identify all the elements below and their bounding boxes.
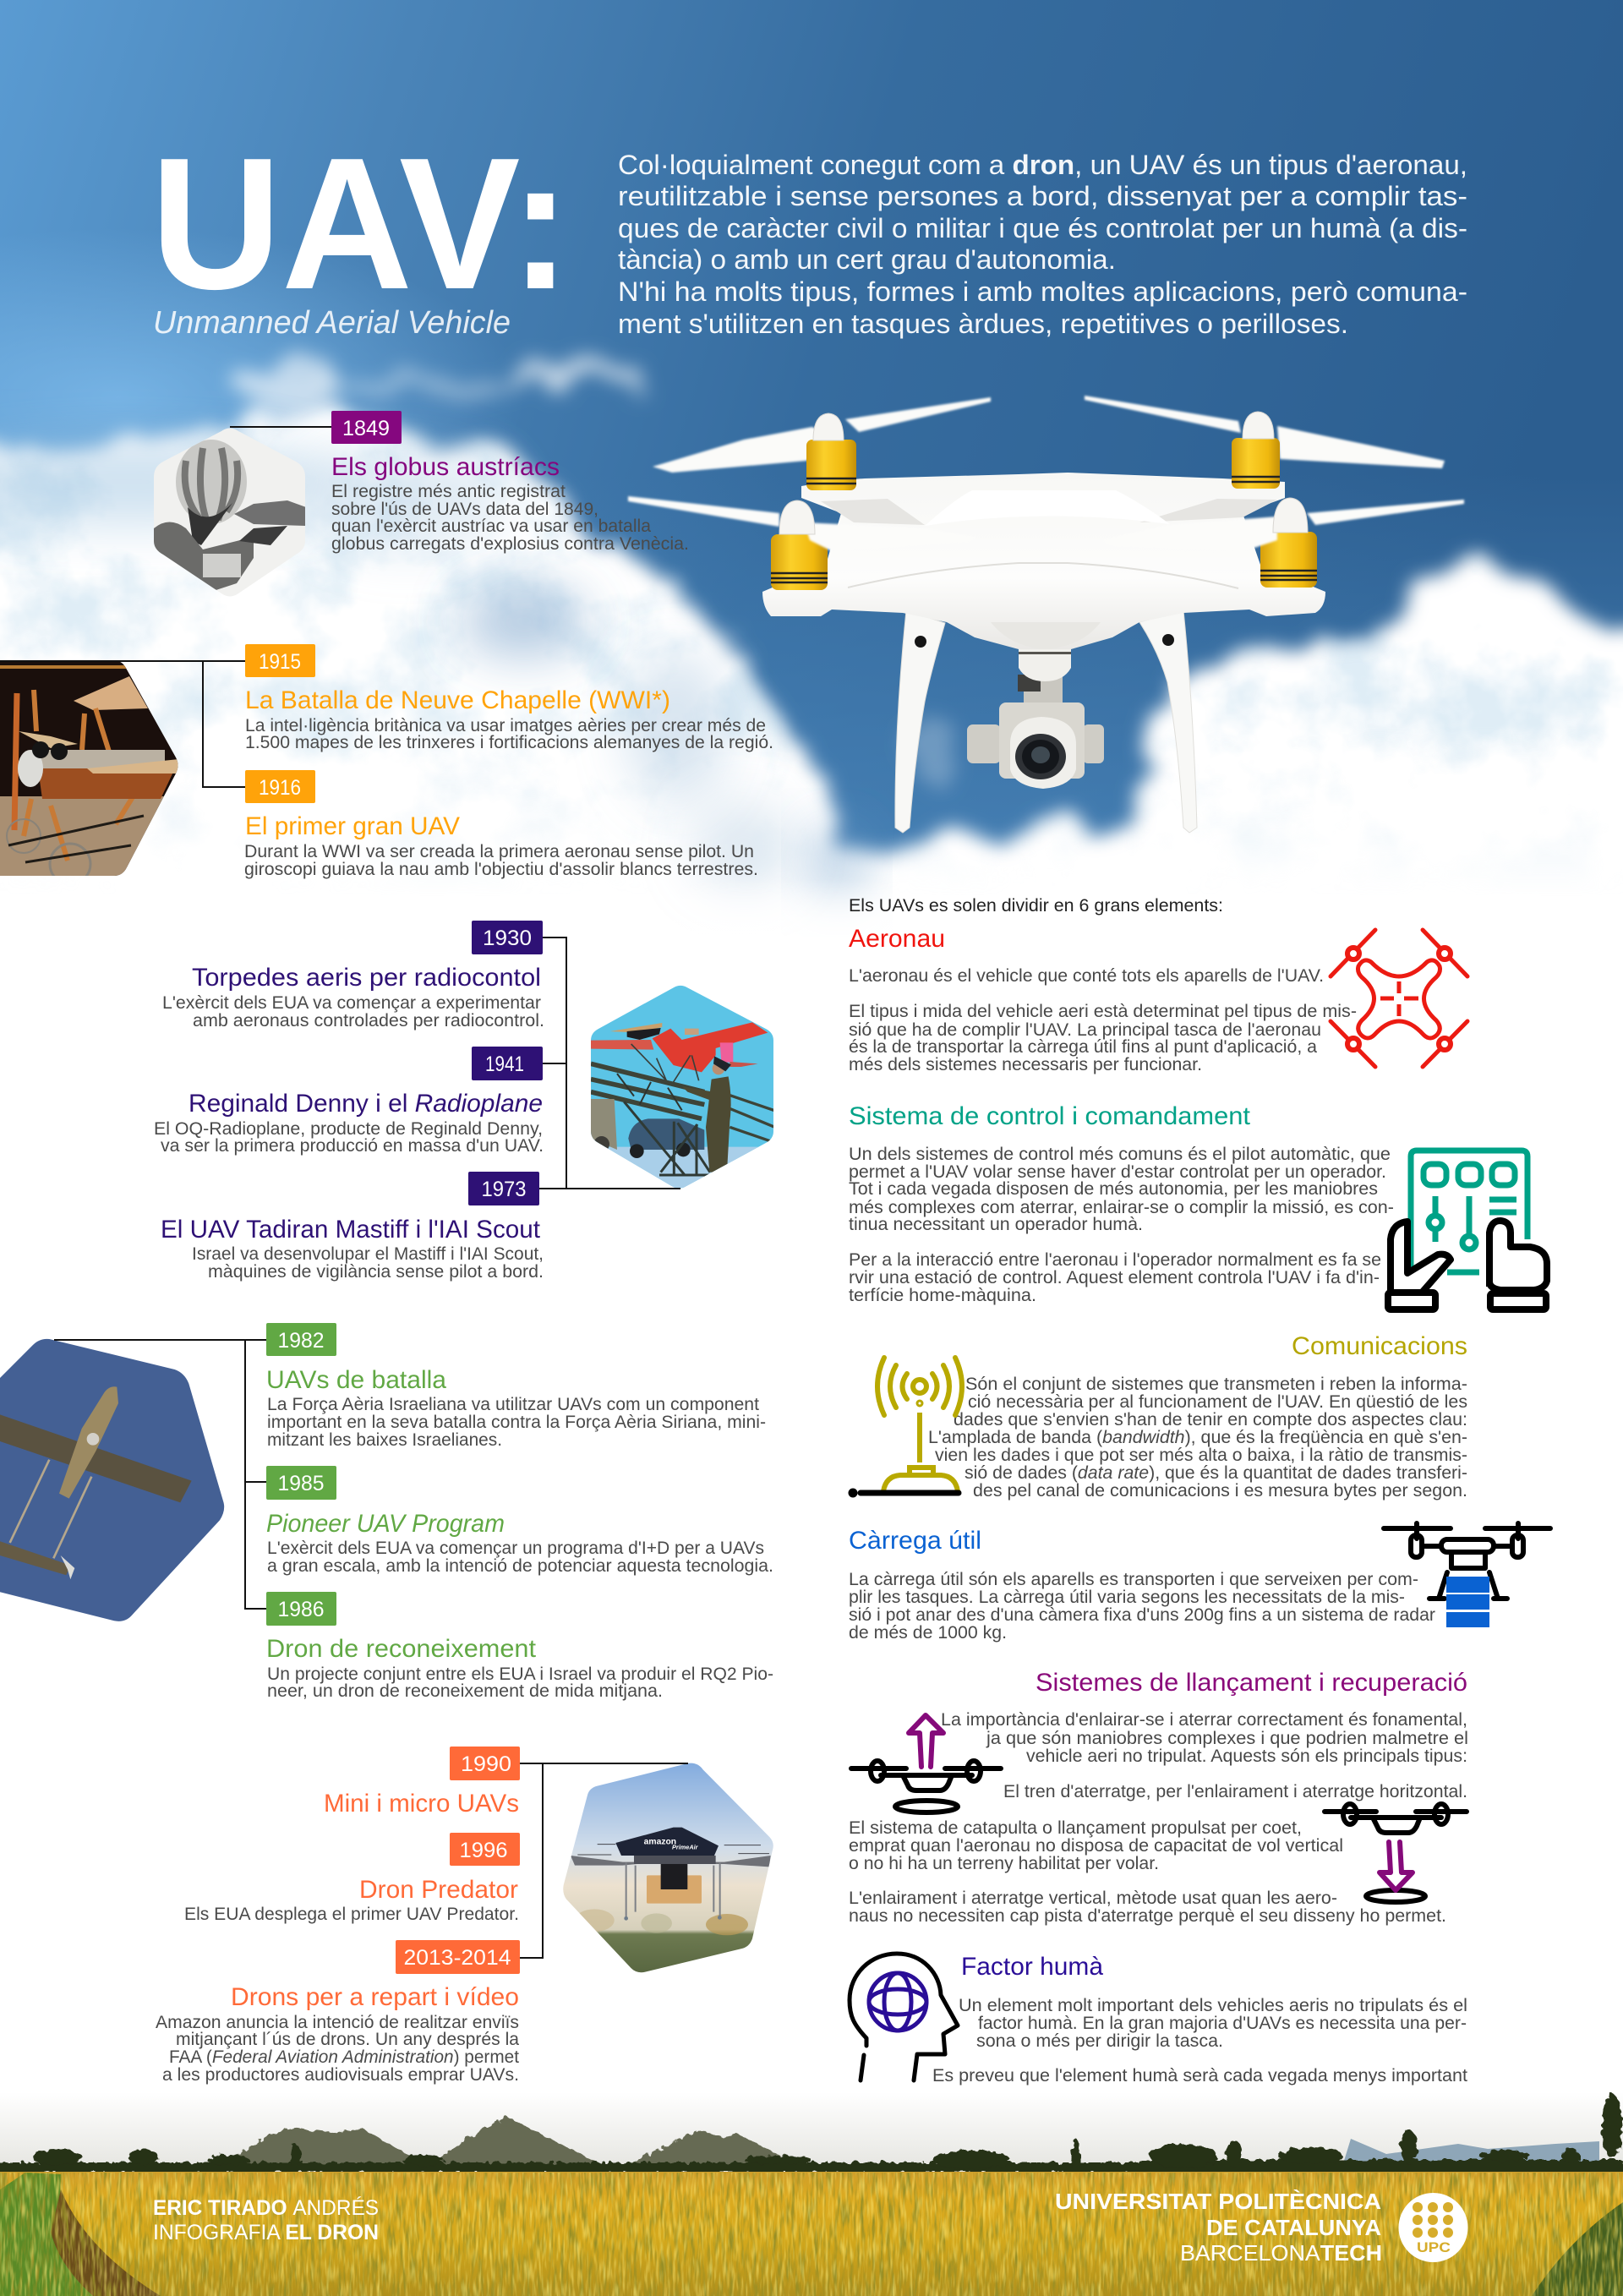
text 1982: mitzant les baixes Israelianes.	[267, 1430, 502, 1450]
green paths	[0, 2173, 101, 2296]
drone illustration	[628, 396, 1464, 833]
body text: factor humà. En la gran majoria d'UAVs es necessita una per-	[978, 2013, 1467, 2033]
heading 1915: La Batalla de Neuve Chapelle (WWI*)	[245, 686, 670, 714]
year badge 2013-2014: 2013-2014	[404, 1946, 511, 1970]
year badge 1996	[450, 1833, 520, 1866]
rear propellers	[653, 396, 1445, 473]
subtitle: Unmanned Aerial Vehicle	[153, 305, 511, 341]
connector	[54, 1340, 266, 1609]
text 1915	[245, 716, 773, 752]
heading 1930: Torpedes aeris per radiocontol	[192, 964, 541, 992]
body text: L'amplada de banda (bandwidth), que és la freqüència en què s'en-	[928, 1427, 1467, 1447]
footer credits	[153, 2195, 379, 2244]
body text: de més de 1000 kg.	[849, 1622, 1007, 1643]
event text: globus carregats d'explosius contra Venècia.	[331, 534, 689, 554]
panel: Aeronau	[849, 925, 1467, 1074]
text 1986	[267, 1665, 773, 1701]
body text: permet a l'UAV volar sense haver d'estar controlat per un operador.	[849, 1162, 1386, 1182]
heading 1982: UAVs de batalla	[266, 1366, 446, 1394]
body text	[849, 1709, 1468, 1926]
year badge 1985	[266, 1466, 336, 1500]
heading: Factor humà	[961, 1953, 1103, 1981]
body text: vehicle aeri no tripulat. Aquests són els principals tipus:	[1026, 1746, 1467, 1766]
year badge 1986: 1986	[277, 1598, 325, 1621]
text 1916: giroscopi guiava la nau amb l'objectiu d'assolir blancs terrestres.	[244, 860, 758, 879]
year badge 1941: 1941	[485, 1052, 524, 1076]
text 2013-2014: FAA (Federal Aviation Administration) permet	[169, 2047, 519, 2067]
intro text block: ment s'utilitzen en tasques àrdues, repetitives o perilloses.	[618, 309, 1348, 339]
motors	[771, 438, 1317, 590]
text 2013-2014: mitjançant l´ús de drons. Un any després la	[176, 2030, 519, 2049]
text 1973: Israel va desenvolupar el Mastiff i l'IAI Scout,	[192, 1244, 544, 1264]
body text	[849, 1569, 1435, 1643]
body text: plir les tasques. La càrrega útil varia segons les necessitats de la mis-	[849, 1587, 1405, 1607]
field	[0, 2172, 1623, 2296]
body text: ja que són maniobres complexes i que podrien malmetre el	[986, 1728, 1468, 1748]
year badge 1990	[450, 1747, 520, 1780]
text 1986: Un projecte conjunt entre els EUA i Israel va produir el RQ2 Pio-	[267, 1665, 773, 1684]
body text	[849, 965, 1357, 1074]
year badge 1915: 1915	[259, 650, 301, 674]
body text: Tot i cada vegada disposen de més autonomia, per les maniobres	[849, 1178, 1378, 1199]
timeline 1990-2014	[156, 1747, 778, 2085]
icon: head with globe	[850, 1954, 958, 2080]
body text: o no hi ha un terreny habilitat per volar.	[849, 1853, 1159, 1873]
front propellers	[628, 496, 1464, 551]
hexagon photo: biplane	[0, 661, 180, 884]
rotor caps	[779, 412, 1308, 534]
legs	[895, 610, 1197, 833]
panel: Sistemes de llançament i recuperació	[849, 1669, 1468, 1926]
text 1996: Els EUA desplega el primer UAV Predator.	[184, 1905, 519, 1924]
text 1941: va ser la primera producció en massa d'un UAV.	[161, 1136, 544, 1156]
year badge 1986	[266, 1592, 336, 1626]
text 1982: important en la seva batalla contra la Força Aèria Siriana, mini-	[267, 1413, 766, 1432]
footer landscape	[0, 2092, 1623, 2296]
body text: Són el conjunt de sistemes que transmeten i reben la informa-	[965, 1374, 1467, 1394]
body text: La càrrega útil són els aparells es transporten i que serveixen per com-	[849, 1569, 1418, 1589]
background: sky	[0, 0, 1623, 1057]
body text: més dels sistemes necessaris per funcionar.	[849, 1054, 1202, 1074]
UPC logo: UPC	[1417, 2239, 1451, 2255]
year badge 1916: 1916	[259, 776, 301, 800]
connector	[520, 1763, 688, 1958]
panel: Càrrega útil	[849, 1523, 1550, 1643]
body text: dades que s'envien s'han de tenir en compte dos aspectes clau:	[954, 1409, 1467, 1430]
timeline 1982-1986	[0, 1323, 773, 1701]
text 1915: 1.500 mapes de les trinxeres i fortificacions alemanyes de la regió.	[245, 733, 773, 752]
hexagon photo: Amazon Prime Air: amazon	[644, 1838, 676, 1847]
footer credits: ERIC TIRADO ANDRÉS	[153, 2195, 379, 2220]
event heading: Els globus austríacs	[331, 453, 560, 481]
body text: des pel canal de comunicacions i es mesura bytes per segon.	[973, 1480, 1467, 1501]
distant mountains	[1344, 2139, 1599, 2164]
text 2013-2014: a les productores audiovisuals emprar UAVs.	[162, 2065, 519, 2085]
panel: Sistema de control i comandament	[849, 1102, 1547, 1309]
icon: cargo drone	[1384, 1523, 1550, 1627]
heading: Sistemes de llançament i recuperació	[1036, 1669, 1467, 1697]
text 1916: Durant la WWI va ser creada la primera aeronau sense pilot. Un	[244, 842, 754, 861]
text 1986: neer, un dron de reconeixement de mida mitjana.	[267, 1681, 663, 1701]
tree line	[0, 2094, 1623, 2174]
text 1930	[162, 993, 544, 1030]
icon: antenna	[850, 1358, 962, 1495]
gimbal and camera	[967, 649, 1104, 789]
text 1916	[244, 842, 758, 879]
hexagon photo: Radioplane	[591, 986, 773, 1189]
intro text block: N'hi ha molts tipus, formes i amb moltes aplicacions, però comuna-	[618, 276, 1467, 307]
body text: El tren d'aterratge, per l'enlairament i aterratge horitzontal.	[1003, 1781, 1467, 1801]
text 1941: El OQ-Radioplane, producte de Reginald Denny,	[154, 1119, 543, 1139]
footer credits: INFOGRAFIA EL DRON	[153, 2221, 379, 2244]
connector	[539, 938, 680, 1189]
body text: L'enlairament i aterratge vertical, mètode usat quan les aero-	[849, 1888, 1337, 1908]
body text: sona o més per dirigir la tasca.	[976, 2031, 1223, 2051]
UPC wordmark: UNIVERSITAT POLITÈCNICA	[1055, 2189, 1381, 2214]
year badge 1916	[245, 770, 315, 803]
body text	[849, 1144, 1394, 1305]
intro text block: ques de caràcter civil o militar i que és controlat per un humà (a dis-	[618, 213, 1467, 243]
year badge 1973	[468, 1172, 539, 1205]
text 1982	[267, 1395, 766, 1450]
UPC logo	[1398, 2193, 1467, 2262]
timeline 1915-1916	[0, 644, 773, 884]
text 1915: La intel·ligència britànica va usar imatges aèries per crear més de	[245, 716, 766, 735]
year badge 2013-2014	[396, 1940, 520, 1974]
body text: més complexes com aterrar, enlairar-se o complir la missió, es con-	[849, 1197, 1394, 1217]
event text	[331, 482, 689, 554]
intro text block: tància) o amb un cert grau d'autonomia.	[618, 244, 1116, 275]
connector	[0, 661, 245, 787]
body text: L'aeronau és el vehicle que conté tots els aparells de l'UAV.	[849, 965, 1324, 986]
heading 1996: Dron Predator	[359, 1876, 518, 1904]
body text: naus no necessiten cap pista d'aterratge perquè el seu disseny ho permet.	[849, 1905, 1446, 1926]
body text: Es preveu que l'element humà serà cada vegada menys important	[932, 2065, 1467, 2086]
body text: Un element molt important dels vehicles aeris no tripulats és el	[959, 1995, 1467, 2015]
text 1941	[154, 1119, 544, 1156]
text 1973: màquines de vigilància sense pilot a bord.	[208, 1262, 544, 1282]
icon: quadcopter	[1331, 930, 1467, 1067]
heading: Comunicacions	[1292, 1332, 1467, 1360]
body text: és la de transportar la càrrega útil fins al punt d'aplicació, a	[849, 1036, 1317, 1057]
heading 1973: El UAV Tadiran Mastiff i l'IAI Scout	[161, 1216, 541, 1244]
text 1985: L'exèrcit dels EUA va començar un programa d'I+D per a UAVs	[267, 1539, 764, 1558]
year badge 1941	[472, 1047, 543, 1080]
body text: terfície home-màquina.	[849, 1285, 1036, 1305]
text 1930: L'exèrcit dels EUA va començar a experimentar	[162, 993, 541, 1013]
UPC wordmark	[1055, 2189, 1382, 2266]
heading 1916: El primer gran UAV	[245, 812, 460, 840]
hexagon photo: Pioneer UAV	[0, 1339, 224, 1621]
body text: ció necessària per al funcionament de l'UAV. En qüestió de les	[968, 1391, 1467, 1412]
year badge 1973: 1973	[482, 1178, 526, 1201]
heading: Càrrega útil	[849, 1527, 981, 1555]
text 2013-2014: Amazon anuncia la intenció de realitzar enviïs	[156, 2013, 519, 2032]
body text: emprat quan l'aeronau no disposa de capacitat de vol vertical	[849, 1835, 1343, 1856]
icon: take-off	[851, 1715, 1001, 1812]
title: UAV:	[150, 119, 571, 329]
body text: tinua necessitant un operador humà.	[849, 1214, 1143, 1234]
body text: sió i pot anar des d'una càmera fixa d'uns 200g fins a un sistema de radar	[849, 1604, 1435, 1625]
connector	[230, 426, 331, 428]
timeline 1849	[153, 411, 689, 599]
background: clouds	[0, 342, 1623, 1057]
body text	[928, 1374, 1467, 1501]
heading 1986: Dron de reconeixement	[266, 1635, 537, 1663]
hexagon photo: Amazon Prime Air	[558, 1758, 778, 1978]
text 1985: a gran escala, amb la intenció de potenciar aquesta tecnologia.	[267, 1556, 773, 1576]
text 1930: amb aeronaus controlades per radiocontrol.	[193, 1011, 544, 1030]
year badge 1982	[266, 1323, 336, 1356]
event text: sobre l'ús de UAVs data del 1849,	[331, 500, 598, 519]
heading: Sistema de control i comandament	[849, 1102, 1251, 1130]
intro line: six elements: Els UAVs es solen dividir en 6 grans elements:	[849, 895, 1223, 916]
body text: Per a la interacció entre l'aeronau i l'operador normalment es fa se	[849, 1249, 1381, 1270]
year badge 1915	[245, 644, 315, 677]
year badge 1930: 1930	[483, 927, 532, 950]
event text: El registre més antic registrat	[331, 482, 566, 501]
body text: sió que ha de complir l'UAV. La principal tasca de l'aeronau	[849, 1020, 1321, 1040]
icon: control tablet with hands	[1388, 1151, 1547, 1309]
panel: Comunicacions	[850, 1332, 1467, 1501]
year badge 1990: 1990	[461, 1752, 511, 1776]
heading 1985: Pioneer UAV Program	[266, 1510, 505, 1538]
UPC wordmark: DE CATALUNYA	[1206, 2215, 1381, 2240]
heading 1941: Reginald Denny i el Radioplane	[189, 1090, 543, 1118]
field texture	[0, 2172, 1623, 2296]
timeline 1930-1973	[154, 921, 780, 1282]
year badge 1996: 1996	[460, 1839, 507, 1862]
heading 1990: Mini i micro UAVs	[324, 1790, 519, 1818]
body text: El sistema de catapulta o llançament propulsat per coet,	[849, 1818, 1302, 1838]
UPC wordmark: BARCELONATECH	[1180, 2240, 1382, 2266]
year badge 1930	[472, 921, 543, 954]
body text	[932, 1995, 1467, 2086]
hexagon photo: balloon	[153, 425, 308, 599]
text 1985	[267, 1539, 773, 1576]
body text: rvir una estació de control. Aquest element controla l'UAV i fa d'in-	[849, 1267, 1380, 1287]
year badge 1985: 1985	[277, 1472, 325, 1495]
intro text block: Col·loquialment conegut com a dron, un UAV és un tipus d'aeronau,	[618, 150, 1467, 180]
white airframe	[762, 473, 1325, 649]
year badge 1982: 1982	[277, 1329, 325, 1353]
body text: Un dels sistemes de control més comuns és el pilot automàtic, que	[849, 1144, 1391, 1164]
event text: quan l'exèrcit austríac va usar en batalla	[331, 517, 651, 536]
sensor dots	[915, 636, 926, 648]
icon: landing	[1325, 1804, 1467, 1902]
body text: La importància d'enlairar-se i aterrar correctament és fonamental,	[941, 1709, 1467, 1730]
body text: El tipus i mida del vehicle aeri està determinat pel tipus de mis-	[849, 1001, 1357, 1021]
text 2013-2014	[156, 2013, 519, 2085]
hills	[222, 2117, 797, 2164]
intro text block: reutilitzable i sense persones a bord, dissenyat per a complir tas-	[618, 181, 1467, 211]
intro text block	[618, 150, 1467, 339]
heading: Aeronau	[849, 925, 945, 953]
heading 2013-2014: Drons per a repart i vídeo	[231, 1983, 519, 2011]
panel: Factor humà	[850, 1953, 1467, 2086]
text 1982: La Força Aèria Israeliana va utilitzar UAVs com un component	[267, 1395, 759, 1414]
year badge	[331, 411, 402, 444]
body text: sió de dades (data rate), que és la quantitat de dades transferi-	[965, 1462, 1467, 1483]
body text: vien les dades i que pot ser més alta o baixa, i la ràtio de transmis-	[935, 1445, 1467, 1465]
year badge: 1849	[342, 417, 390, 440]
text 1973	[192, 1244, 544, 1282]
hexagon photo: Amazon Prime Air: PrimeAir	[672, 1844, 699, 1851]
